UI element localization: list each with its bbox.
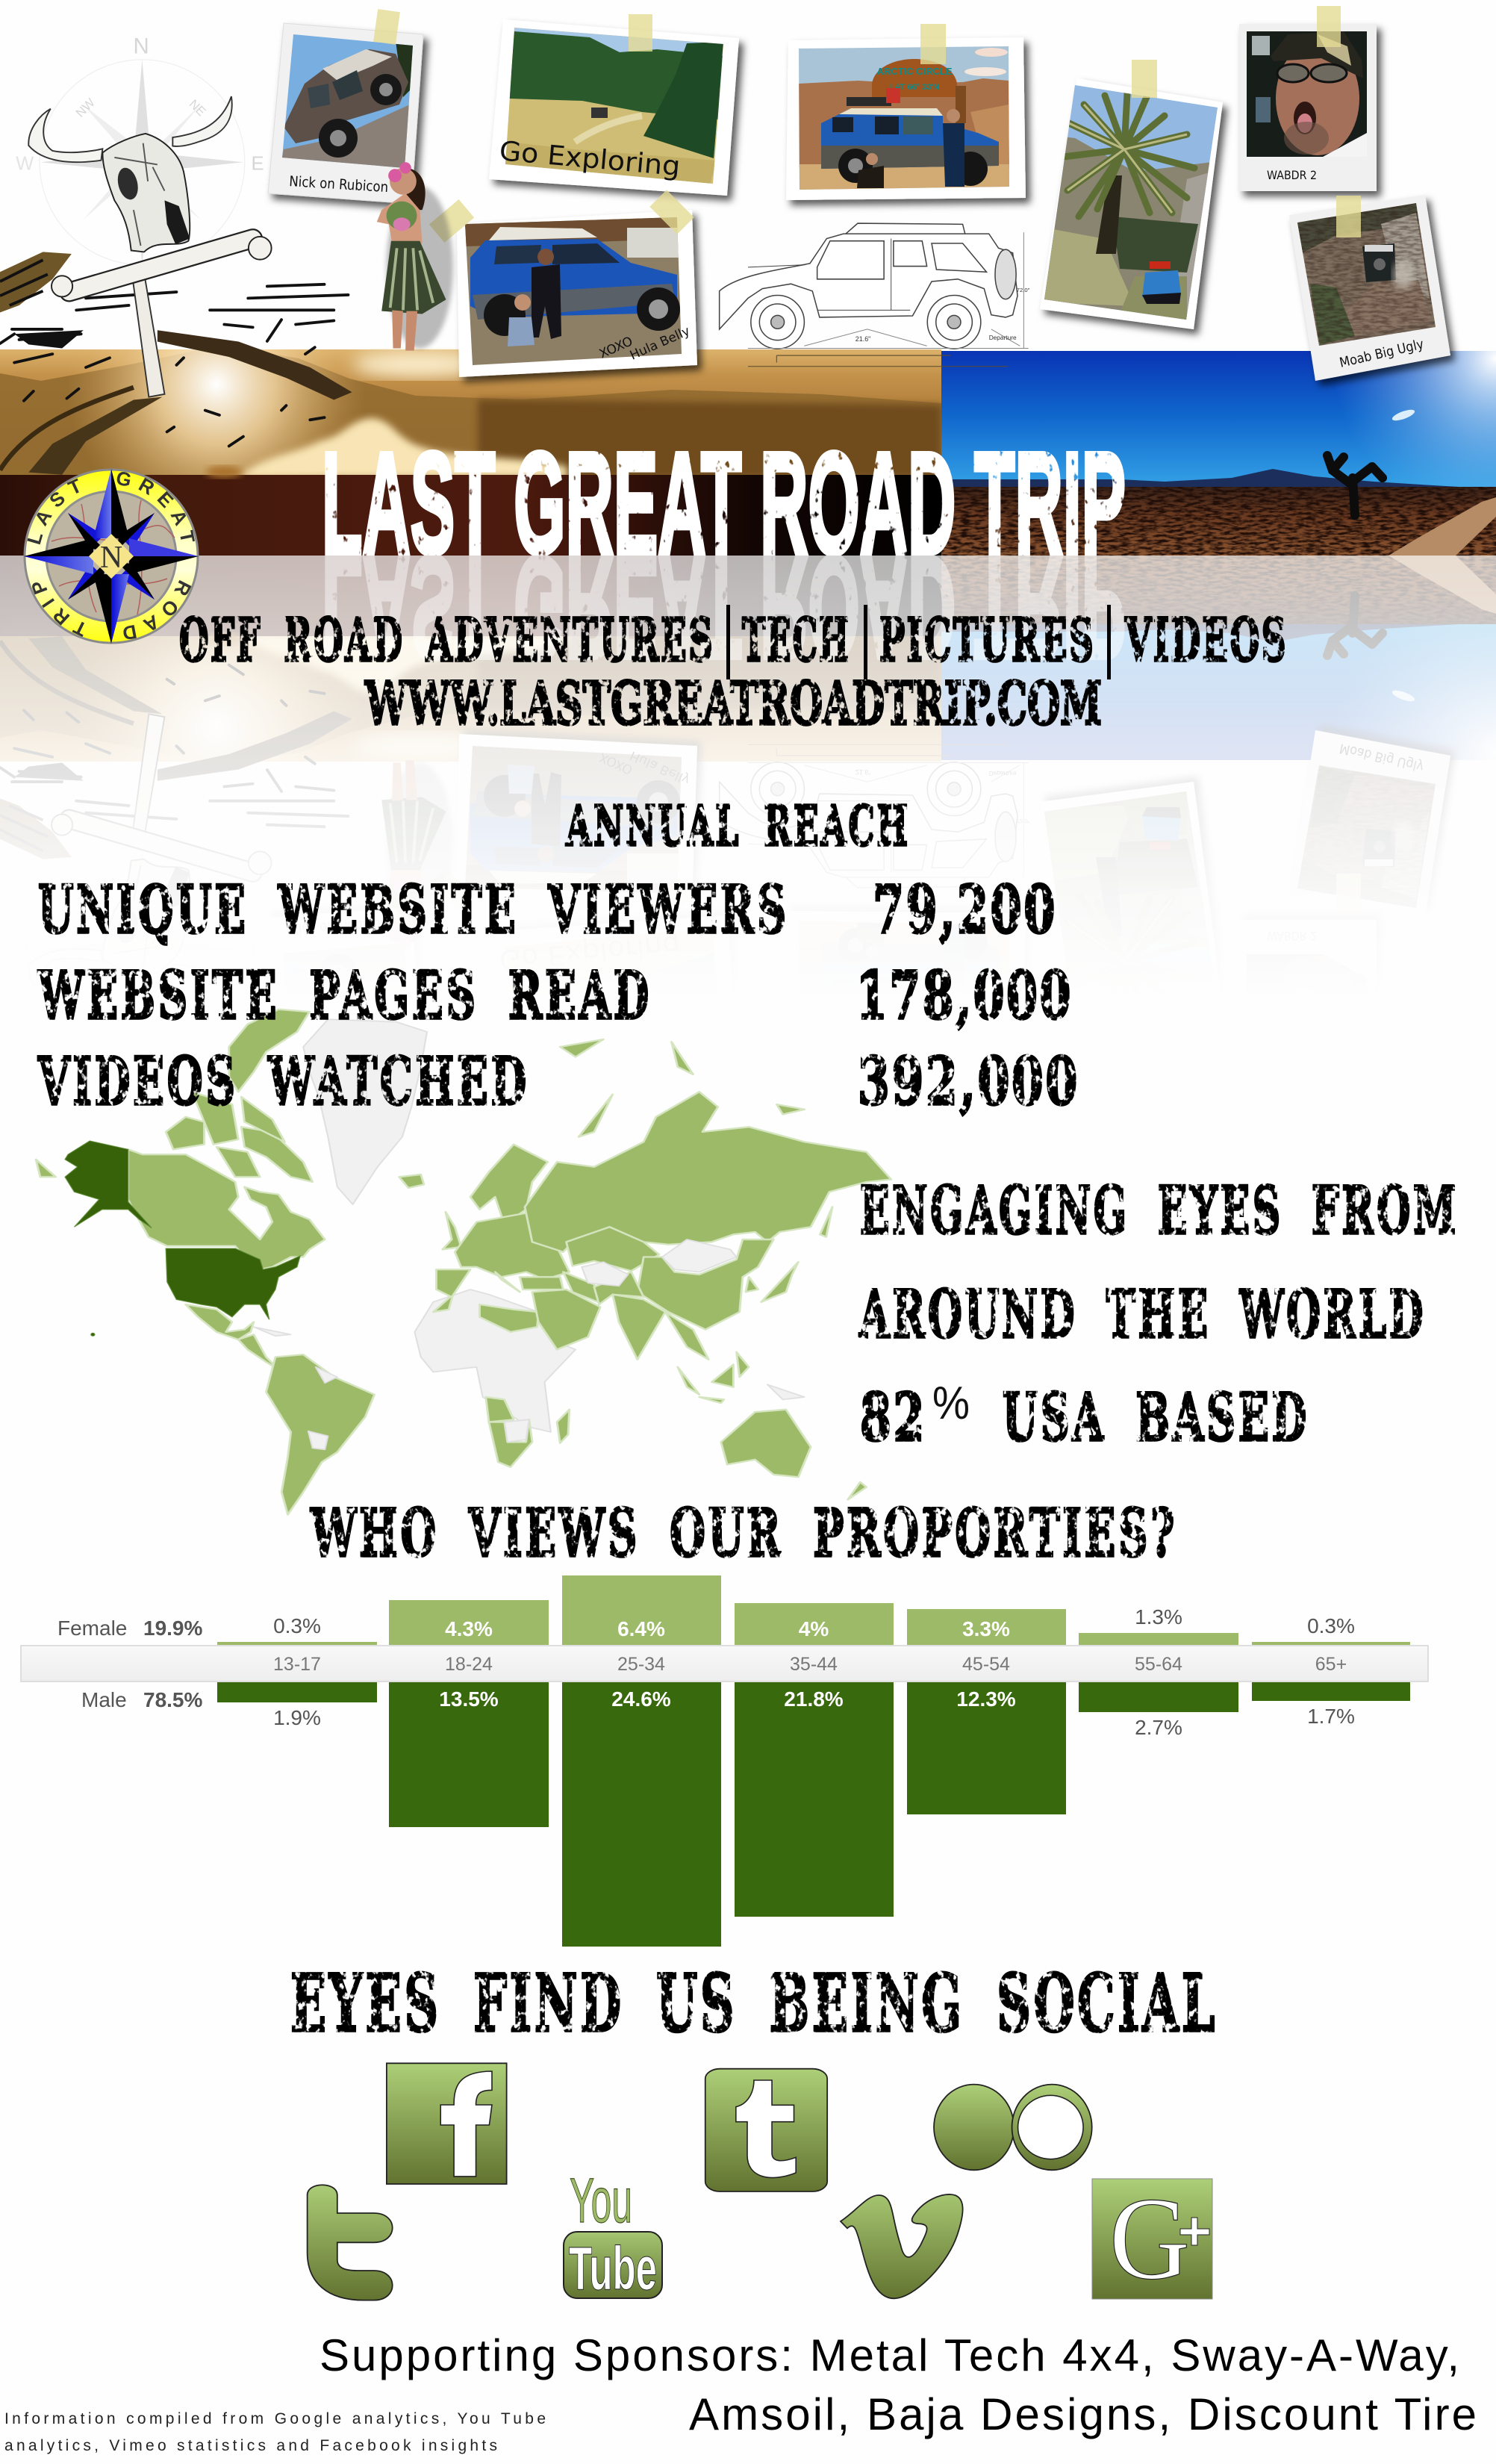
source note xyxy=(4,2410,546,2454)
age labels: 55-64 xyxy=(1135,1654,1182,1675)
callout: engaging eyes from around the world, 82% USA based: USA BASED xyxy=(1003,1378,1309,1456)
line drawing: FJ Cruiser blueprint: 72.0" xyxy=(1017,287,1030,293)
female values xyxy=(273,1605,1355,1640)
bar chart: audience age and gender xyxy=(21,1575,1428,1947)
section heading: annual reach: ANNUAL REACH xyxy=(565,794,910,859)
photo: Moab Big Ugly xyxy=(1289,195,1450,381)
tape strip on Go Exploring photo xyxy=(629,14,652,52)
badge lettering: ROAD xyxy=(123,580,191,639)
icon: twitter xyxy=(308,2185,393,2300)
male values: 13.5% xyxy=(439,1687,499,1711)
reflection of hero scene xyxy=(0,526,1496,1105)
sponsors text: Supporting Sponsors: Metal Tech 4x4, Sway-A-Way, xyxy=(320,2330,1459,2380)
male values xyxy=(273,1687,1355,1739)
tagline: off road adventures, tech, pictures, videos: TECH xyxy=(742,605,850,675)
male values: 21.8% xyxy=(784,1687,844,1711)
panel: desert sunset landscape xyxy=(0,349,941,556)
icon: youtube: You xyxy=(570,2165,632,2236)
stats: videos watched: 392,000 xyxy=(858,1042,1079,1120)
map: countries with some audience xyxy=(36,1009,891,1514)
caption: XOXO Hula Belly: XOXO xyxy=(597,334,635,362)
female legend: 19.9% xyxy=(143,1617,202,1640)
icon: youtube xyxy=(564,2165,662,2303)
badge lettering: TRIP xyxy=(32,582,84,637)
figure: hula dancer xyxy=(377,162,453,351)
female bars xyxy=(217,1575,1410,1646)
illustration: compass rose sketch: N xyxy=(134,34,149,59)
illustration: cow skull on post with crossbone and ink landscape xyxy=(0,96,352,475)
icon: vimeo xyxy=(841,2194,963,2298)
age labels: 35-44 xyxy=(790,1654,838,1675)
male values: 1.9% xyxy=(273,1706,321,1729)
female values: 3.3% xyxy=(962,1617,1010,1640)
caption: XOXO Hula Belly: Hula Belly xyxy=(628,323,692,364)
male legend: Male xyxy=(81,1688,127,1711)
illustration: compass rose sketch: E xyxy=(252,153,264,174)
source note: analytics, Vimeo statistics and Facebook insights xyxy=(4,2437,497,2454)
photo: Go Exploring xyxy=(489,19,739,196)
photo: palm tree xyxy=(1038,78,1224,329)
male values: 12.3% xyxy=(956,1687,1016,1711)
tape strip on Moab photo xyxy=(1336,196,1361,237)
sponsors text xyxy=(320,2330,1477,2439)
male values: 1.7% xyxy=(1307,1705,1355,1728)
photo: XOXO Hula Belly xyxy=(457,210,697,377)
female values: 0.3% xyxy=(273,1614,321,1637)
badge lettering xyxy=(27,472,195,639)
badge lettering: LAST xyxy=(27,478,79,545)
source note: Information compiled from Google analytics, You Tube xyxy=(4,2410,546,2427)
tape strip on Arctic photo xyxy=(920,24,946,64)
line drawing: FJ Cruiser blueprint: 21.6" xyxy=(855,335,870,343)
male legend xyxy=(81,1688,202,1711)
badge lettering: GREAT xyxy=(116,472,195,542)
illustration: compass rose sketch: W xyxy=(16,153,34,174)
icon: youtube: Tube xyxy=(569,2235,657,2303)
social icons xyxy=(308,2063,1212,2304)
female legend: Female xyxy=(57,1617,127,1640)
line drawing: FJ Cruiser blueprint: Departure xyxy=(989,334,1017,341)
compass star xyxy=(24,469,199,644)
age labels: 25-34 xyxy=(617,1654,665,1675)
photo: WABDR 2 portrait xyxy=(1239,24,1377,191)
stats: unique website viewers: 79,200 xyxy=(873,871,1057,948)
compass star: N xyxy=(100,541,122,575)
tagline: off road adventures, tech, pictures, videos: PICTURES xyxy=(879,605,1095,675)
male legend: 78.5% xyxy=(143,1688,202,1711)
age labels: 13-17 xyxy=(273,1654,321,1675)
female values: 0.3% xyxy=(1307,1614,1355,1637)
male values: 2.7% xyxy=(1135,1716,1182,1739)
world map: visitors by country xyxy=(36,1009,891,1514)
caption: Nick on Rubicon: Nick on Rubicon xyxy=(289,173,389,196)
logo: Last Great Road Trip compass badge xyxy=(24,469,199,644)
age labels: 18-24 xyxy=(445,1654,493,1675)
age labels: 45-54 xyxy=(962,1654,1010,1675)
website address: WWW.LASTGREATROADTRIP.COM xyxy=(364,668,1102,738)
female values: 1.3% xyxy=(1135,1605,1182,1628)
photo: Arctic Circle sign: LAT 66° 33'N xyxy=(890,83,939,92)
icon: facebook xyxy=(387,2063,507,2184)
panel: blue sky desert photograph xyxy=(941,351,1496,556)
line drawing: FJ Cruiser blueprint xyxy=(720,223,1030,367)
callout: engaging eyes from around the world, 82% USA based: % xyxy=(932,1378,970,1429)
female values: 4% xyxy=(799,1617,829,1640)
illustration: compass rose sketch xyxy=(16,34,264,265)
stats: unique website viewers: UNIQUE WEBSITE VIEWERS xyxy=(38,871,789,948)
caption: Moab Big Ugly: Moab Big Ugly xyxy=(1338,336,1425,371)
tape strip on WABDR photo xyxy=(1317,6,1341,47)
tape strip on palm photo xyxy=(1132,60,1157,98)
map: Greenland and unreached regions xyxy=(303,1019,805,1432)
caption: Go Exploring: Go Exploring xyxy=(498,136,682,182)
hero scene with sketch, collage and landscape xyxy=(0,6,1496,556)
photo: Arctic Circle sign: ARCTIC CIRCLE xyxy=(876,66,953,77)
illustration: compass rose sketch: NE xyxy=(187,96,208,119)
sponsors text: Amsoil, Baja Designs, Discount Tire xyxy=(689,2389,1477,2439)
photo: Nick on Rubicon xyxy=(268,23,423,204)
stats: website pages read: 178,000 xyxy=(856,956,1073,1034)
callout: engaging eyes from around the world, 82% USA based: 82 xyxy=(860,1378,926,1456)
female values: 6.4% xyxy=(617,1617,665,1640)
icon: google plus: G xyxy=(1109,2174,1190,2304)
male bars xyxy=(217,1681,1410,1947)
age axis band xyxy=(21,1646,1428,1681)
age labels xyxy=(273,1654,1347,1675)
stats: videos watched: VIDEOS WATCHED xyxy=(37,1042,529,1120)
photo: Arctic Circle sign xyxy=(786,37,1026,200)
stats: website pages read: WEBSITE PAGES READ xyxy=(37,956,652,1034)
caption: XOXO Hula Belly xyxy=(597,323,692,364)
icon: flickr xyxy=(934,2085,1092,2170)
female legend xyxy=(57,1617,202,1640)
caption: WABDR 2: WABDR 2 xyxy=(1267,168,1317,182)
female values: 4.3% xyxy=(445,1617,493,1640)
tagline: off road adventures, tech, pictures, videos: OFF ROAD ADVENTURES xyxy=(179,605,714,675)
tape strips on Hula Belly photo xyxy=(429,190,694,243)
icon: tumblr xyxy=(705,2069,827,2191)
callout: engaging eyes from around the world, 82% USA based xyxy=(858,1172,1459,1456)
tape strip on Rubicon photo xyxy=(373,9,400,45)
tagline: off road adventures, tech, pictures, videos: VIDEOS xyxy=(1124,605,1288,675)
map: United States highlighted dark green xyxy=(65,1141,300,1336)
illustration: compass rose sketch: NW xyxy=(73,96,98,120)
male values: 24.6% xyxy=(611,1687,671,1711)
age labels: 65+ xyxy=(1315,1654,1347,1675)
map: small unreached countries xyxy=(254,1239,737,1449)
